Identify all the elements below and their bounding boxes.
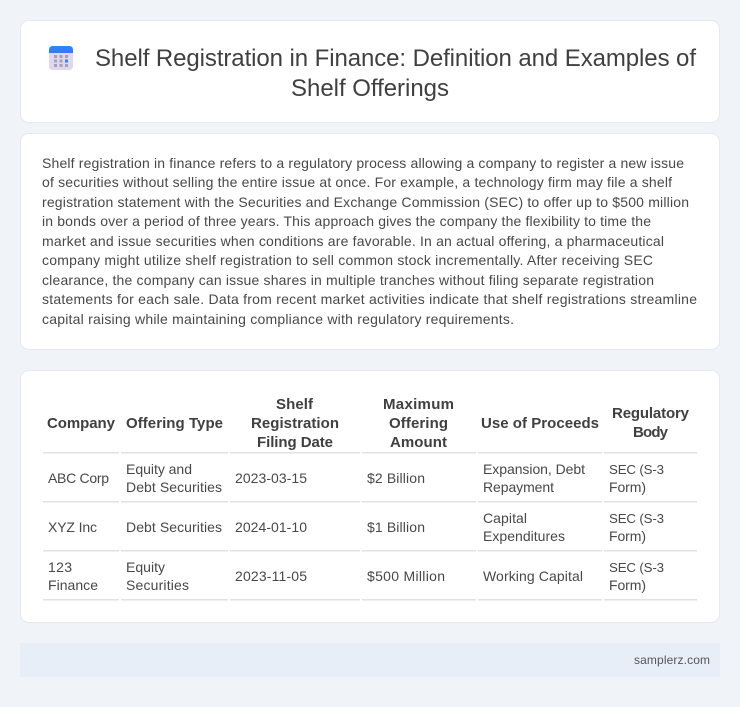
table row: ABC Corp: $2 Billion [367, 470, 425, 486]
description text [42, 155, 697, 327]
table header: Body [633, 424, 669, 441]
title [95, 45, 696, 102]
footer bar: samplerz.com [634, 653, 710, 667]
table row: XYZ Inc: Capital [483, 510, 527, 526]
table row: XYZ Inc: Debt Securities [126, 519, 222, 535]
table row: 123 Finance: SEC (S-3 [609, 560, 664, 575]
table row: ABC Corp: Repayment [483, 479, 554, 495]
table header: Shelf [276, 396, 314, 413]
table header: Filing Date [257, 434, 333, 451]
icon: calendar [49, 46, 73, 70]
table row: 123 Finance: $500 Million [367, 568, 445, 584]
table header: Offering [389, 415, 448, 432]
table row: ABC Corp [48, 461, 664, 495]
table row: 123 Finance: Finance [48, 577, 98, 593]
table row: ABC Corp: SEC (S-3 [609, 462, 664, 477]
panel: title card [20, 20, 720, 122]
description text: in bonds over a period of three years. This approach gives the company the flexibility to time the [42, 213, 651, 229]
table row: 123 Finance: Working Capital [483, 568, 583, 584]
description text: of securities without selling the entire issue at once. For example, a technology firm may file a shelf [42, 174, 672, 190]
table row: XYZ Inc: SEC (S-3 [609, 511, 664, 526]
table row: XYZ Inc: $1 Billion [367, 519, 425, 535]
description text: statements for each sale. Data from recent market activities indicate that shelf registrations streamline [42, 291, 697, 307]
table header: Regulatory [612, 405, 690, 422]
table row: XYZ Inc: XYZ Inc [48, 519, 97, 535]
table row: XYZ Inc: Form) [609, 528, 646, 544]
table header [47, 396, 690, 451]
table row: ABC Corp: Debt Securities [126, 479, 222, 495]
table header: Offering Type [126, 415, 223, 432]
description text: capital raising while maintaining compliance with regulatory requirements. [42, 311, 514, 327]
table row: 123 Finance: Form) [609, 577, 646, 593]
description text: market and issue securities when conditions are favorable. In an actual offering, a pharmaceutical [42, 233, 664, 249]
table row: ABC Corp: 2023-03-15 [235, 470, 307, 486]
table rules [43, 452, 697, 600]
table row: ABC Corp: ABC Corp [48, 470, 109, 486]
description text: company might utilize shelf registration to sell common stock incrementally. After receiving SEC [42, 252, 653, 268]
panel: table card [20, 370, 720, 622]
table row: 123 Finance: 123 [48, 559, 72, 575]
table row: 123 Finance: 2023-11-05 [235, 568, 307, 584]
footer bar [20, 643, 720, 677]
table header: Company [47, 415, 116, 432]
description text: Shelf registration in finance refers to a regulatory process allowing a company to register a new issue [42, 155, 684, 171]
table row: XYZ Inc: 2024-01-10 [235, 519, 307, 535]
table header: Registration [251, 415, 339, 432]
panel: description card [20, 134, 720, 350]
table row: 123 Finance [48, 559, 664, 593]
table row: 123 Finance: Equity [126, 559, 165, 575]
table header: Amount [390, 434, 447, 451]
title: Shelf Registration in Finance: Definition and Examples of [95, 45, 696, 72]
table row: XYZ Inc [48, 510, 664, 544]
table row: XYZ Inc: Expenditures [483, 528, 565, 544]
table row: ABC Corp: Form) [609, 479, 646, 495]
description text: clearance, the company can issue shares in multiple tranches without filing separate registration [42, 272, 654, 288]
title: Shelf Offerings [291, 75, 449, 102]
table header: Use of Proceeds [481, 415, 599, 432]
description text: registration statement with the Securities and Exchange Commission (SEC) to offer up to $500 million [42, 194, 689, 210]
table row: ABC Corp: Expansion, Debt [483, 461, 585, 477]
table header: Maximum [383, 396, 454, 413]
table row: ABC Corp: Equity and [126, 461, 192, 477]
table row: 123 Finance: Securities [126, 577, 189, 593]
